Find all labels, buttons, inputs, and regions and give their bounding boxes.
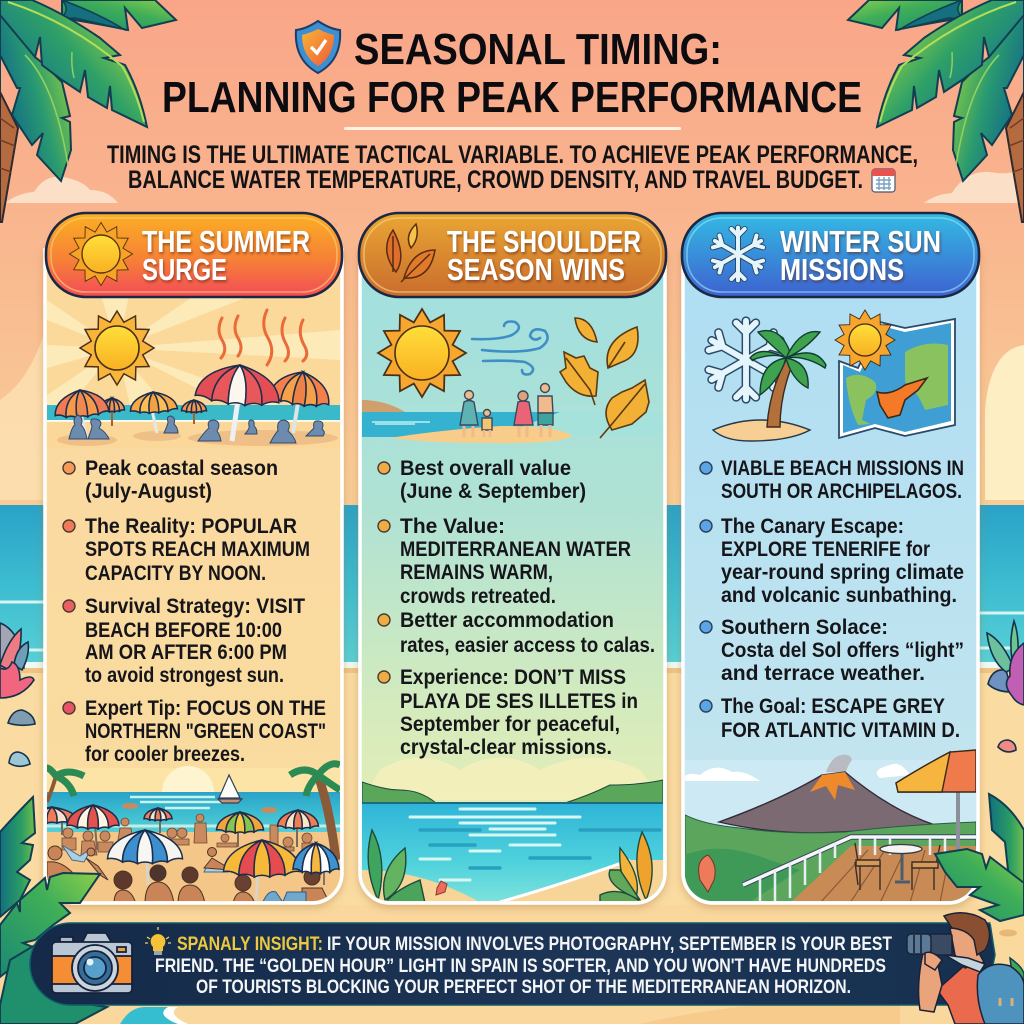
wind lines bbox=[472, 322, 548, 374]
header: the shoulder season wins: THE SHOULDER bbox=[447, 224, 641, 259]
bullets: winter: The Canary Escape: bbox=[721, 515, 904, 538]
beach umbrellas bbox=[27, 805, 318, 850]
heat waves bbox=[219, 310, 307, 365]
bullets: winter: The Goal: ESCAPE GREY bbox=[721, 695, 945, 718]
bullets: summer: The Reality: POPULAR bbox=[85, 515, 297, 538]
title bbox=[162, 21, 862, 122]
bullets: winter: and volcanic sunbathing. bbox=[721, 584, 957, 607]
family bbox=[460, 384, 553, 437]
icon: sun bbox=[70, 222, 132, 286]
background people bbox=[62, 814, 313, 855]
bullets: summer: BEACH BEFORE 10:00 bbox=[85, 619, 282, 642]
bullets: shoulder bbox=[378, 457, 655, 759]
foreground people bbox=[47, 846, 330, 904]
bullets: winter: EXPLORE TENERIFE for bbox=[721, 538, 930, 561]
bullets: shoulder: rates, easier access to calas. bbox=[400, 634, 655, 657]
bullets: shoulder: MEDITERRANEAN WATER bbox=[400, 538, 631, 561]
crowded beach scene bbox=[27, 764, 340, 904]
bullets: summer: (July-August) bbox=[85, 480, 212, 503]
bullets: shoulder: PLAYA DE SES ILLETES in bbox=[400, 690, 638, 713]
chairs and table bbox=[855, 843, 940, 890]
bullets: shoulder: The Value: bbox=[400, 515, 505, 538]
bullets: winter: Southern Solace: bbox=[721, 616, 888, 639]
sunbathers bbox=[69, 415, 324, 443]
bullets: winter: and terrace weather. bbox=[721, 662, 925, 685]
banner: spanaly insight: OF TOURISTS BLOCKING YOUR PERFECT SHOT OF THE MEDITERRANEAN HORIZON. bbox=[196, 976, 851, 998]
illustration: snowflake, palm island and map bbox=[685, 310, 976, 905]
bullets: winter: SOUTH OR ARCHIPELAGOS. bbox=[721, 480, 962, 503]
bullets: winter: FOR ATLANTIC VITAMIN D. bbox=[721, 719, 960, 742]
title: PLANNING FOR PEAK PERFORMANCE bbox=[162, 73, 862, 122]
bullets: summer: for cooler breezes. bbox=[85, 743, 245, 766]
bullets: summer: Survival Strategy: VISIT bbox=[85, 595, 305, 618]
palm tree: top left bbox=[0, 0, 176, 222]
banner: spanaly insight: IF YOUR MISSION INVOLVES PHOTOGRAPHY, SEPTEMBER IS YOUR BEST bbox=[327, 933, 892, 955]
bullets: shoulder: Best overall value bbox=[400, 457, 571, 480]
title: SEASONAL TIMING: bbox=[354, 25, 722, 74]
palm tree: top right bbox=[848, 0, 1024, 222]
title underline bbox=[344, 127, 681, 130]
panel: winter sun bbox=[682, 213, 979, 905]
bullets: summer: AM OR AFTER 6:00 PM bbox=[85, 641, 287, 664]
palm leaves: bottom left bbox=[0, 797, 107, 1024]
header: the summer surge bbox=[46, 213, 342, 297]
bullets: shoulder: (June & September) bbox=[400, 480, 586, 503]
icon: snowflake bbox=[713, 228, 763, 280]
panel: shoulder season bbox=[359, 213, 666, 903]
banner: spanaly insight: SPANALY INSIGHT: bbox=[177, 933, 323, 955]
bullets: winter bbox=[700, 457, 964, 742]
icon: autumn leaves bbox=[387, 224, 435, 282]
icon: shield with check bbox=[296, 21, 340, 73]
subtitle bbox=[107, 141, 918, 194]
autumn leaves bbox=[560, 318, 649, 438]
header: winter sun missions: MISSIONS bbox=[780, 252, 904, 287]
bullets: winter: VIABLE BEACH MISSIONS IN bbox=[721, 457, 964, 480]
bullets: summer: to avoid strongest sun. bbox=[85, 664, 284, 687]
banner: spanaly insight bbox=[30, 923, 995, 1005]
bullets: winter: year-round spring climate bbox=[721, 561, 964, 584]
bullets: summer: SPOTS REACH MAXIMUM bbox=[85, 538, 310, 561]
header: the summer surge: THE SUMMER bbox=[142, 224, 310, 259]
palm leaves: bottom right bbox=[935, 794, 1024, 921]
volcano and terrace scene bbox=[685, 750, 976, 905]
bullets: shoulder: crystal-clear missions. bbox=[400, 736, 612, 759]
bullets: shoulder: REMAINS WARM, bbox=[400, 561, 553, 584]
bullets: summer bbox=[63, 457, 326, 766]
header: winter sun missions: WINTER SUN bbox=[780, 224, 941, 259]
bullets: summer: Expert Tip: FOCUS ON THE bbox=[85, 697, 326, 720]
header: the shoulder season wins: SEASON WINS bbox=[447, 252, 625, 287]
icon: calendar bbox=[872, 169, 895, 192]
cafe umbrella bbox=[956, 790, 960, 850]
header: winter sun missions bbox=[682, 213, 979, 297]
icon: camera bbox=[52, 933, 132, 993]
coral and shell: right shore bbox=[987, 621, 1024, 752]
bullets: summer: Peak coastal season bbox=[85, 457, 278, 480]
umbrellas bbox=[53, 361, 333, 441]
calm cove scene bbox=[362, 758, 663, 903]
header: the summer surge: SURGE bbox=[142, 252, 227, 287]
bullets: shoulder: crowds retreated. bbox=[400, 585, 556, 608]
sailboat bbox=[218, 775, 242, 803]
bullets: shoulder: Experience: DON’T MISS bbox=[400, 666, 626, 689]
bullets: shoulder: September for peaceful, bbox=[400, 713, 620, 736]
illustration: family on beach with sun and leaves bbox=[362, 309, 663, 903]
bullets: summer: CAPACITY BY NOON. bbox=[85, 562, 266, 585]
sand dune: bottom right bbox=[985, 915, 1024, 1024]
palms bbox=[47, 776, 56, 802]
panel: summer surge bbox=[27, 213, 342, 904]
bullets: shoulder: Better accommodation bbox=[400, 609, 614, 632]
icon: light bulb bbox=[145, 927, 171, 955]
photographer with camera bbox=[907, 913, 1024, 1024]
coral and rocks: left shore bbox=[0, 623, 35, 766]
illustration: crowded summer beach with sun and heat bbox=[27, 290, 340, 904]
bullets: winter: Costa del Sol offers “light” bbox=[721, 639, 964, 662]
bullets: summer: NORTHERN "GREEN COAST" bbox=[85, 720, 326, 743]
header: the shoulder season wins bbox=[359, 213, 666, 297]
